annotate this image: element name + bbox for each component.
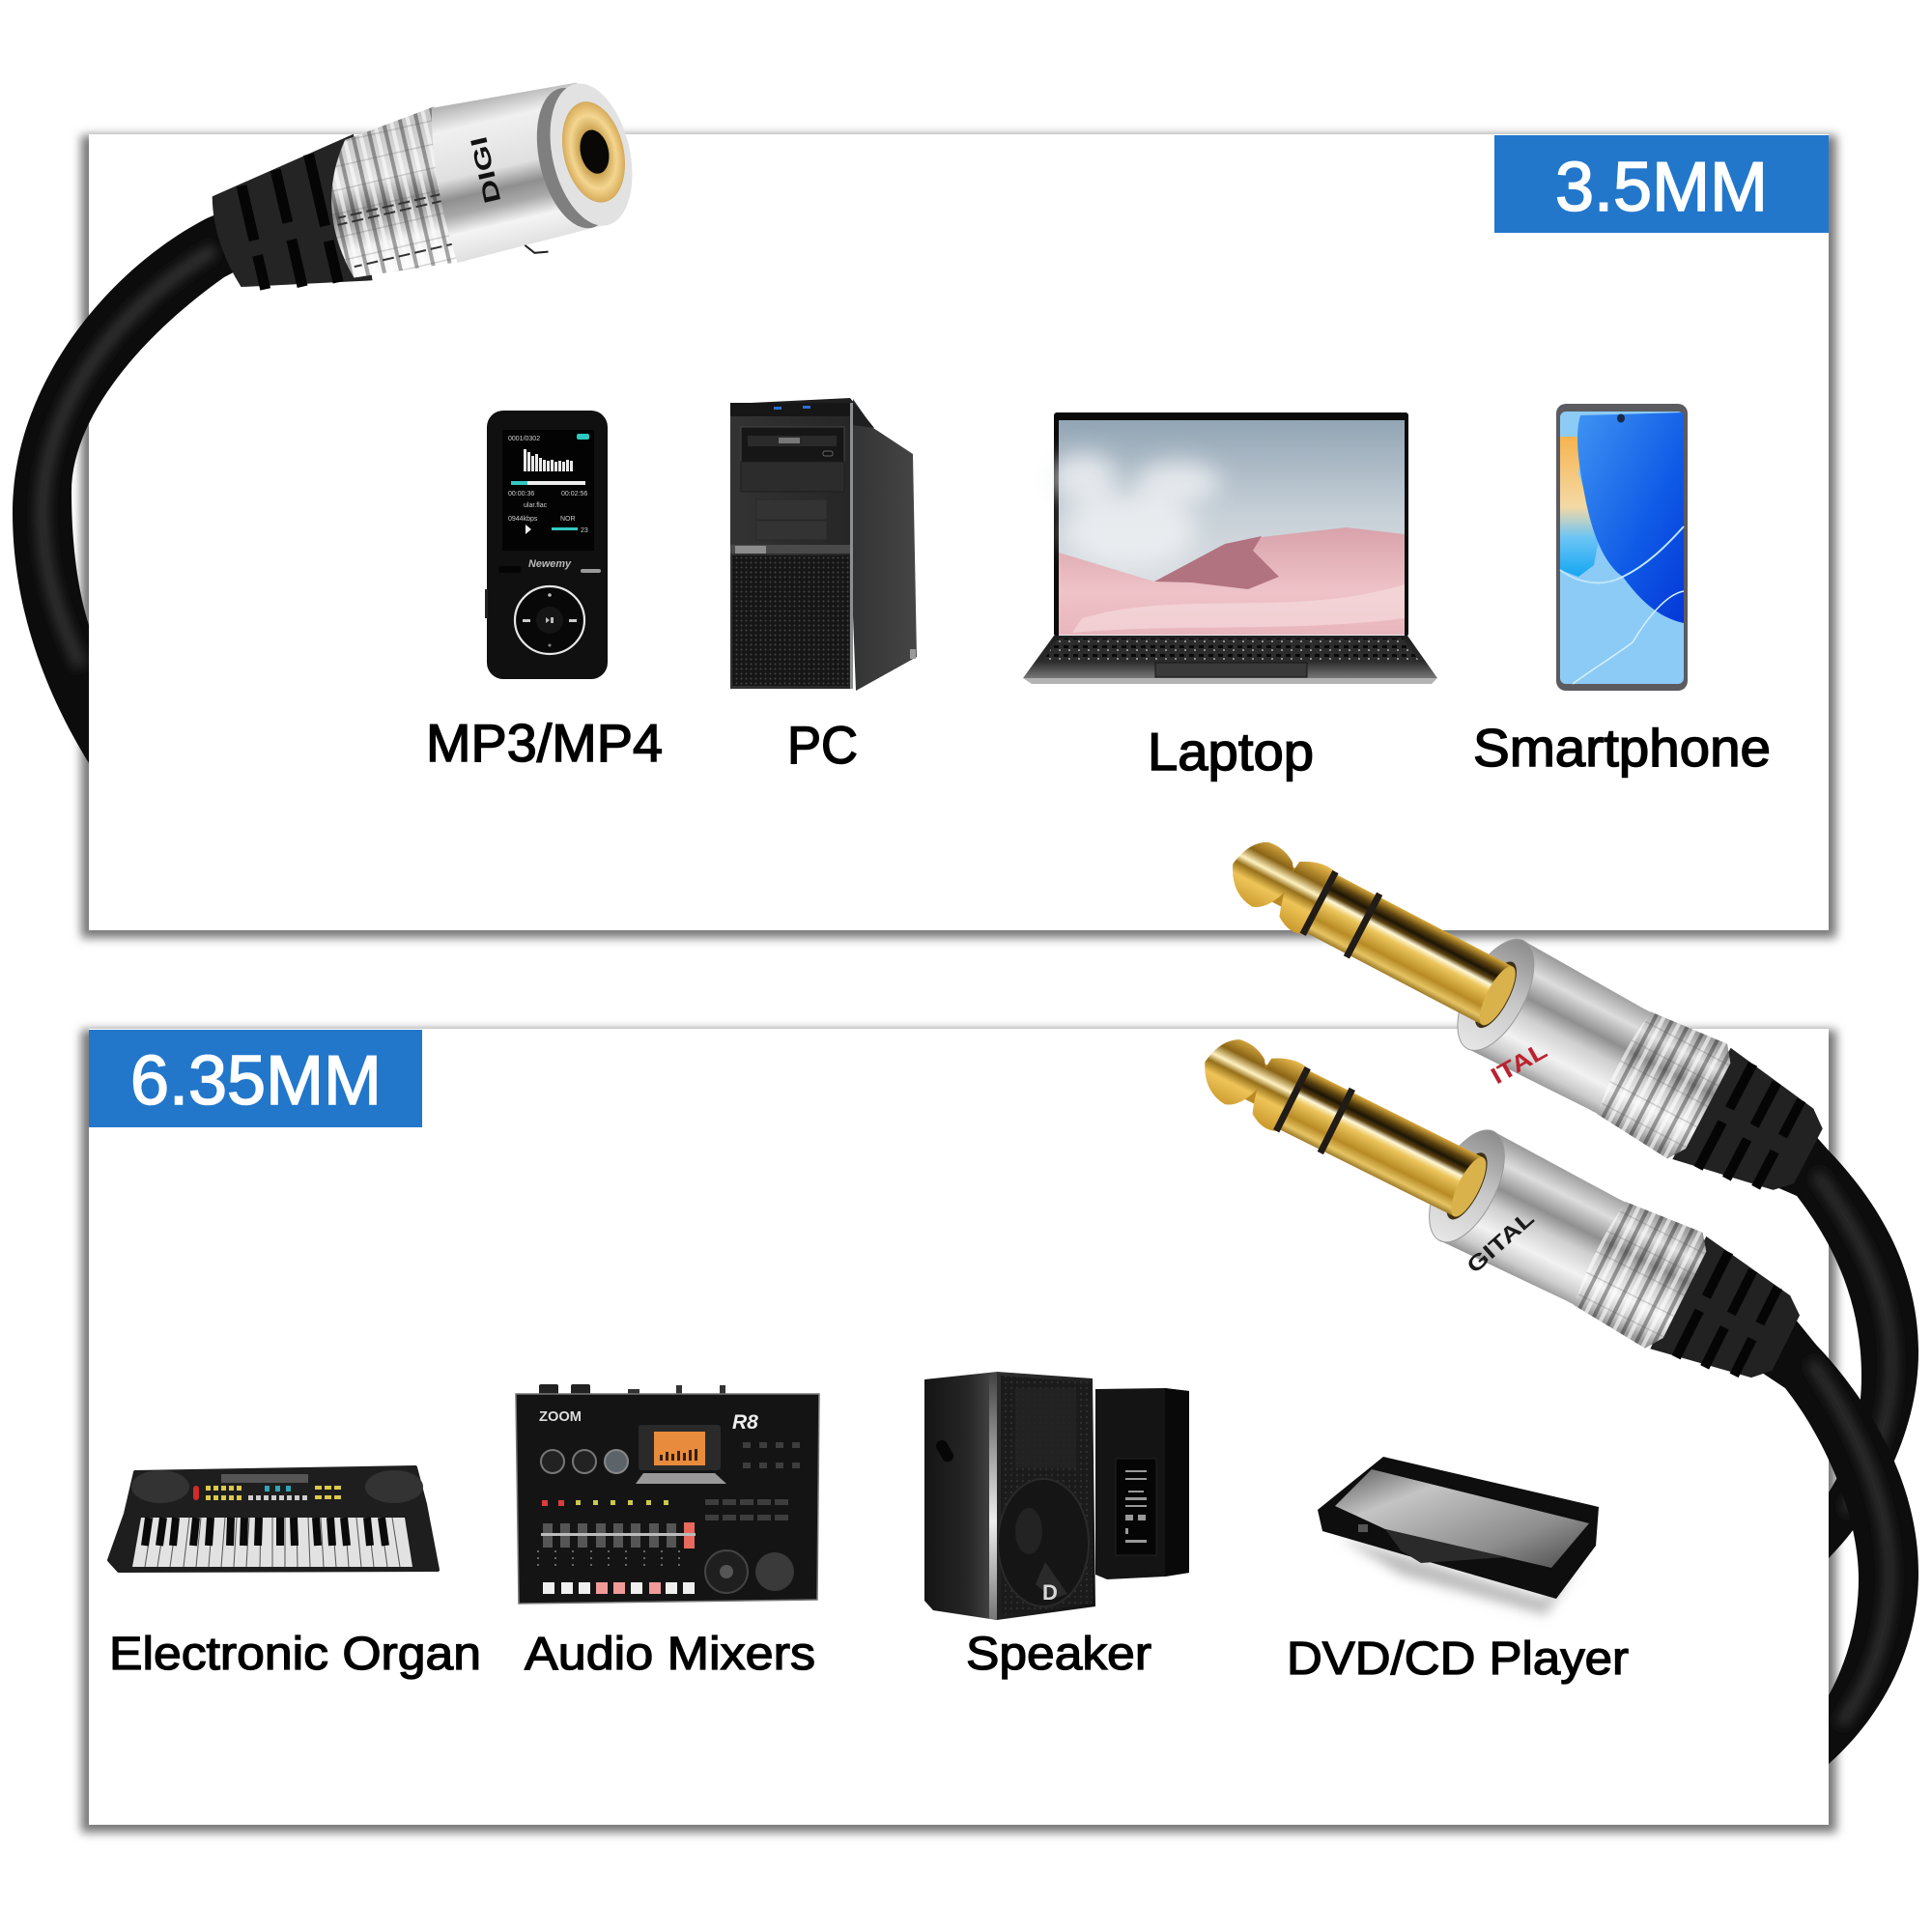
shaft end bbox=[1473, 962, 1522, 1030]
panel background bbox=[89, 134, 1829, 930]
gold shaft bbox=[1304, 873, 1513, 1025]
tip bbox=[1219, 832, 1303, 918]
red print: ITAL bbox=[1487, 1037, 1551, 1090]
label: DVD/CD Player: DVD/CD Player bbox=[1287, 1634, 1629, 1685]
tag: 6.35MM: 6.35MM bbox=[130, 1042, 382, 1120]
device: MP3 player: Newemy bbox=[528, 558, 572, 570]
label: Electronic Organ: Electronic Organ bbox=[109, 1629, 481, 1680]
barrel bbox=[1467, 941, 1653, 1117]
tag: 3.5MM bbox=[1494, 135, 1829, 233]
cable: 6.35mm upper bbox=[1779, 1138, 1918, 1558]
label: Speaker: Speaker bbox=[966, 1629, 1151, 1680]
device: audio mixer: ZOOM bbox=[539, 1408, 582, 1425]
device: MP3 player: 00:02:56 bbox=[561, 491, 587, 497]
neck bbox=[1236, 1059, 1281, 1108]
smooth barrel bbox=[420, 67, 646, 264]
jack: 6.35mm lower plug bbox=[1173, 1000, 1813, 1414]
device: MP3 player: NOR bbox=[560, 516, 576, 523]
device: audio mixer: R8 bbox=[732, 1411, 758, 1434]
device: speakers bbox=[924, 1372, 1189, 1620]
device: smartphone bbox=[1556, 404, 1688, 691]
connector: 3.5mm female plug bbox=[200, 66, 648, 324]
shaft end bbox=[1444, 1152, 1492, 1221]
panel: 6.35mm devices bbox=[81, 1029, 1836, 1833]
knurled sleeve bbox=[1563, 1191, 1713, 1353]
label: Smartphone: Smartphone bbox=[1473, 718, 1771, 778]
device: MP3 player bbox=[485, 411, 608, 679]
gold face bbox=[553, 96, 635, 209]
cable: 3.5mm side bbox=[13, 208, 246, 763]
label: MP3/MP4: MP3/MP4 bbox=[426, 713, 663, 773]
neck bbox=[1264, 862, 1309, 911]
barrel bbox=[1439, 1131, 1628, 1307]
panel: 3.5mm devices bbox=[81, 134, 1836, 938]
cable: 6.35mm lower bbox=[1753, 1309, 1918, 1764]
device: audio mixer bbox=[516, 1384, 819, 1604]
label: PC: PC bbox=[787, 715, 858, 775]
device: electronic organ bbox=[109, 1467, 438, 1571]
strain relief bbox=[1650, 1236, 1812, 1402]
label: Audio Mixers: Audio Mixers bbox=[525, 1629, 815, 1680]
second contact bbox=[1268, 854, 1338, 937]
tag: 6.35MM bbox=[89, 1030, 422, 1127]
device: MP3 player: 0944kbps bbox=[508, 516, 538, 523]
insulating rings bbox=[1303, 871, 1379, 957]
knurled sleeve bbox=[1586, 1002, 1738, 1164]
black print: GITAL bbox=[1462, 1206, 1539, 1278]
device: MP3 player: 00:00:36 bbox=[508, 491, 534, 497]
barrel mark bbox=[525, 241, 548, 257]
knurled sleeve bbox=[313, 106, 469, 288]
device: PC tower bbox=[730, 398, 917, 691]
panel background bbox=[89, 1029, 1829, 1825]
tag: 3.5MM: 3.5MM bbox=[1555, 149, 1768, 226]
socket bbox=[1466, 956, 1524, 1034]
gold shaft bbox=[1278, 1069, 1483, 1216]
tip bbox=[1192, 1030, 1275, 1115]
insulating rings bbox=[1276, 1067, 1352, 1153]
strain relief bbox=[1672, 1048, 1836, 1214]
second contact bbox=[1241, 1050, 1310, 1134]
barrel text: DIGI bbox=[466, 134, 506, 206]
device: MP3 player: 23 bbox=[581, 527, 588, 534]
jack hole bbox=[576, 127, 613, 177]
device: DVD/CD player bbox=[1318, 1457, 1599, 1615]
collar bbox=[1442, 927, 1549, 1063]
device: speakers: D bbox=[1042, 1580, 1058, 1605]
device: MP3 player: ular.flac bbox=[524, 502, 548, 509]
collar bbox=[1414, 1119, 1520, 1254]
jack: 6.35mm upper plug bbox=[1197, 803, 1837, 1231]
label: Laptop: Laptop bbox=[1148, 722, 1314, 781]
strain relief bbox=[202, 134, 386, 312]
device: MP3 player: 0001/0302 bbox=[508, 436, 540, 442]
device: laptop bbox=[1023, 412, 1437, 684]
socket bbox=[1438, 1148, 1495, 1225]
